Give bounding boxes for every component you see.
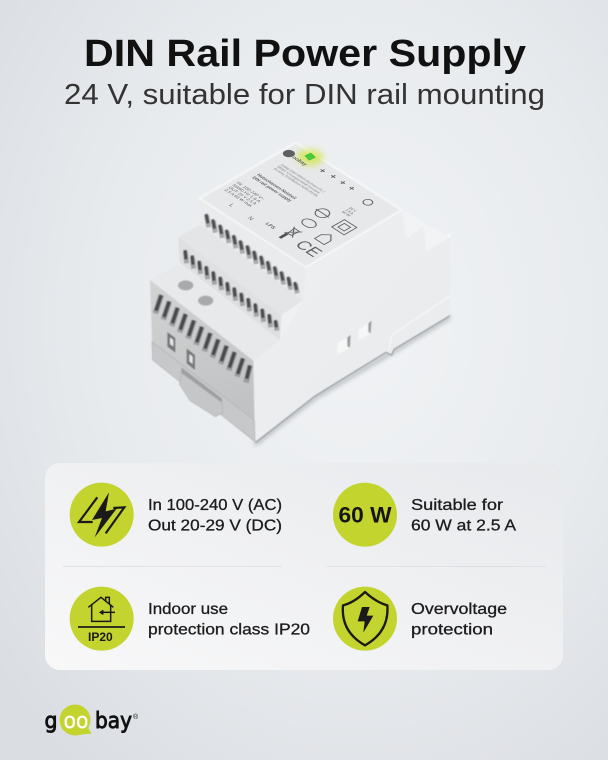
icon: voltage bolt bbox=[70, 483, 134, 547]
text: indoor use: protection class IP20 bbox=[148, 622, 310, 638]
terminal slots bbox=[167, 332, 195, 370]
text: overvoltage protection bbox=[411, 601, 507, 638]
printed label on top face: 38364 Schoeppenstedt Germany bbox=[276, 165, 321, 194]
feature card bbox=[45, 463, 563, 670]
lower vents bbox=[155, 295, 250, 383]
text: wattage: Suitable for bbox=[411, 497, 504, 514]
printed label on top face: Goobay GmbH Wilhelm-Bruchmann-Str. 2 bbox=[279, 163, 326, 193]
printed label on top face: OUT: 24 V 2.5 A bbox=[227, 186, 258, 205]
text: indoor use bbox=[148, 601, 310, 638]
printed label on top face: 2.5 A bbox=[344, 209, 355, 215]
logo: goobay bbox=[44, 704, 139, 735]
icon: 60 W bbox=[333, 483, 397, 547]
rail clip bbox=[179, 373, 223, 417]
printed label on top face bbox=[208, 147, 392, 260]
side rail crease bbox=[389, 296, 450, 350]
screw holes bbox=[178, 280, 213, 306]
printed label on top face: 24 V bbox=[348, 207, 358, 213]
icon: IP20 indoor house bbox=[70, 587, 134, 651]
device shadow bbox=[255, 317, 450, 444]
text: wattage bbox=[411, 497, 516, 534]
printed label on top face: oobay bbox=[290, 155, 308, 167]
text: overvoltage protection: Overvoltage bbox=[411, 601, 507, 618]
printed label on top face: IN: 100-240 V~ bbox=[235, 181, 267, 201]
device side panel bbox=[253, 210, 450, 442]
lower front face bbox=[150, 280, 255, 442]
printed label on top face: 2.5 A 60 W max bbox=[223, 188, 255, 208]
upper vents bbox=[206, 214, 297, 293]
side clips bbox=[337, 321, 372, 355]
second vent face bbox=[178, 237, 281, 341]
lower step top bbox=[150, 264, 280, 361]
product: DIN rail power supply device bbox=[150, 143, 450, 444]
printed label on top face: N bbox=[246, 216, 254, 221]
text: input and output voltage: In 100-240 V (AC) bbox=[148, 497, 282, 514]
green LED bbox=[297, 149, 323, 165]
text: input and output voltage bbox=[148, 497, 282, 534]
subtitle: 24 V, suitable for DIN rail mounting bbox=[64, 79, 545, 111]
printed label on top face: Goobay Distribution Netherlands bbox=[272, 167, 319, 197]
printed label on top face: L bbox=[227, 203, 236, 208]
row divider right bbox=[327, 566, 546, 567]
device lower edge bbox=[255, 316, 450, 443]
logo: goobay: oo bbox=[64, 709, 88, 734]
logo: goobay: g bbox=[44, 709, 58, 734]
logo: goobay: ® bbox=[133, 713, 139, 721]
icon: 60 W: 60 W bbox=[338, 502, 392, 528]
top face bbox=[199, 143, 402, 267]
second vents bbox=[185, 250, 277, 331]
printed label on top face: CE bbox=[291, 237, 327, 259]
printed label on top face: Hutschienen-Netzteil bbox=[256, 173, 298, 200]
rear notches bbox=[405, 217, 450, 252]
text: indoor use: Indoor use bbox=[148, 601, 228, 618]
logo: goobay: bay bbox=[95, 709, 132, 734]
printed label on top face: LPS bbox=[263, 222, 277, 230]
text: overvoltage protection: protection bbox=[411, 622, 493, 638]
upper vent face bbox=[199, 199, 306, 300]
icon: IP20 indoor house: IP20 bbox=[88, 630, 113, 644]
lower base strip bbox=[152, 342, 255, 442]
printed label on top face: 60 W bbox=[341, 211, 352, 217]
printed label on top face: DIN rail power supply bbox=[251, 176, 293, 203]
text: wattage: 60 W at 2.5 A bbox=[411, 518, 516, 534]
text: input and output voltage: Out 20-29 V (DC) bbox=[148, 518, 282, 534]
row divider left bbox=[63, 566, 282, 567]
title: DIN Rail Power Supply bbox=[84, 33, 526, 75]
rail clip recess bbox=[181, 367, 222, 405]
icon: overvoltage shield bbox=[333, 587, 397, 651]
second step top bbox=[178, 225, 303, 315]
printed label on top face: 50/60 Hz 1.6 A bbox=[231, 183, 262, 203]
